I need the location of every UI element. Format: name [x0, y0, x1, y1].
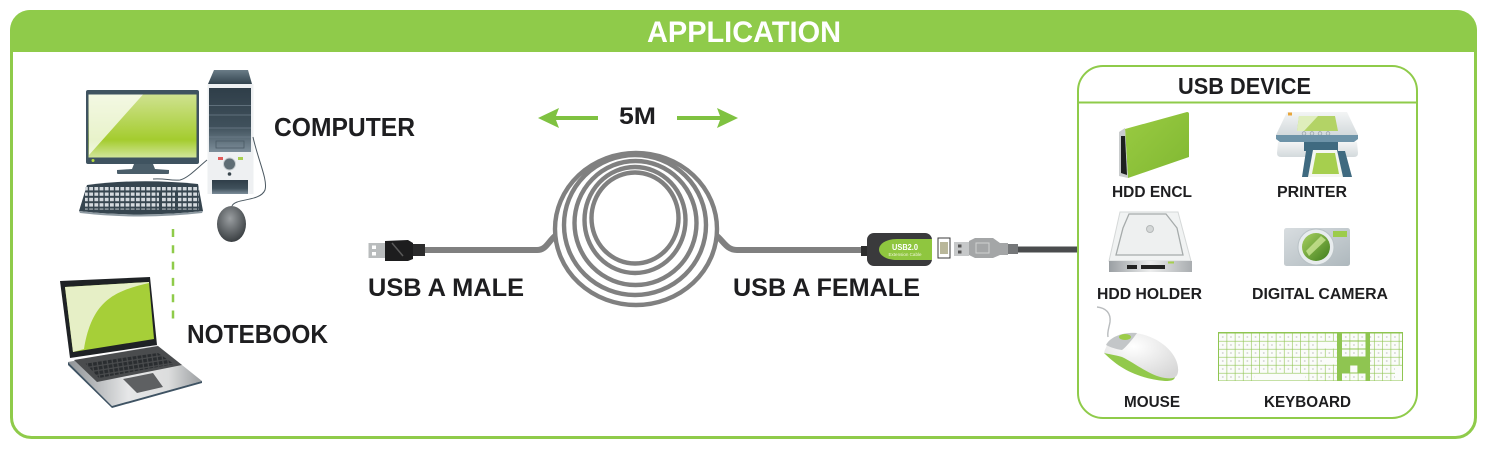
dashed link [172, 229, 174, 319]
arrow: left [538, 108, 598, 128]
panel: usb device [1078, 66, 1417, 418]
computer tower [208, 70, 254, 194]
icon: usb mouse [1097, 307, 1178, 381]
mouse [217, 206, 246, 242]
label: computer: COMPUTER [274, 112, 415, 142]
icon: hdd holder [1109, 212, 1192, 272]
icon: desktop computer [79, 70, 266, 242]
monitor [86, 90, 199, 174]
icon: printer [1276, 112, 1358, 177]
icon: hdd enclosure [1119, 112, 1189, 178]
label: hdd holder: HDD HOLDER [1097, 286, 1202, 303]
icon: digital camera [1284, 228, 1350, 266]
label: 5m: 5M [619, 103, 656, 130]
usb a male plug [368, 240, 425, 261]
panel heading: USB DEVICE [1178, 73, 1311, 99]
usb a female connector [845, 233, 932, 266]
female port [938, 238, 950, 258]
label: digital camera: DIGITAL CAMERA [1252, 286, 1388, 303]
label: usb a female: USB A FEMALE [733, 274, 920, 302]
label: notebook: NOTEBOOK [187, 319, 328, 349]
arrow: right [677, 108, 738, 128]
label: hdd encl: HDD ENCL [1112, 184, 1192, 201]
icon: notebook [60, 277, 202, 408]
label: mouse: MOUSE [1124, 394, 1180, 411]
label: usb a male: USB A MALE [368, 274, 524, 302]
icon: green keyboard [1218, 332, 1403, 381]
usb device plug [954, 238, 1078, 258]
usb a female connector: USB2.0 [892, 243, 919, 252]
notebook keyboard [74, 346, 182, 382]
cable coil [425, 153, 847, 305]
usb a female connector: Extension Cable [888, 252, 922, 257]
connecting cables [153, 137, 266, 206]
header band [10, 10, 1477, 52]
notebook screen [60, 277, 157, 358]
label: keyboard: KEYBOARD [1264, 394, 1351, 411]
keyboard [79, 181, 203, 216]
notebook base [68, 345, 202, 406]
label: printer: PRINTER [1277, 184, 1347, 201]
title: APPLICATION [647, 16, 841, 49]
